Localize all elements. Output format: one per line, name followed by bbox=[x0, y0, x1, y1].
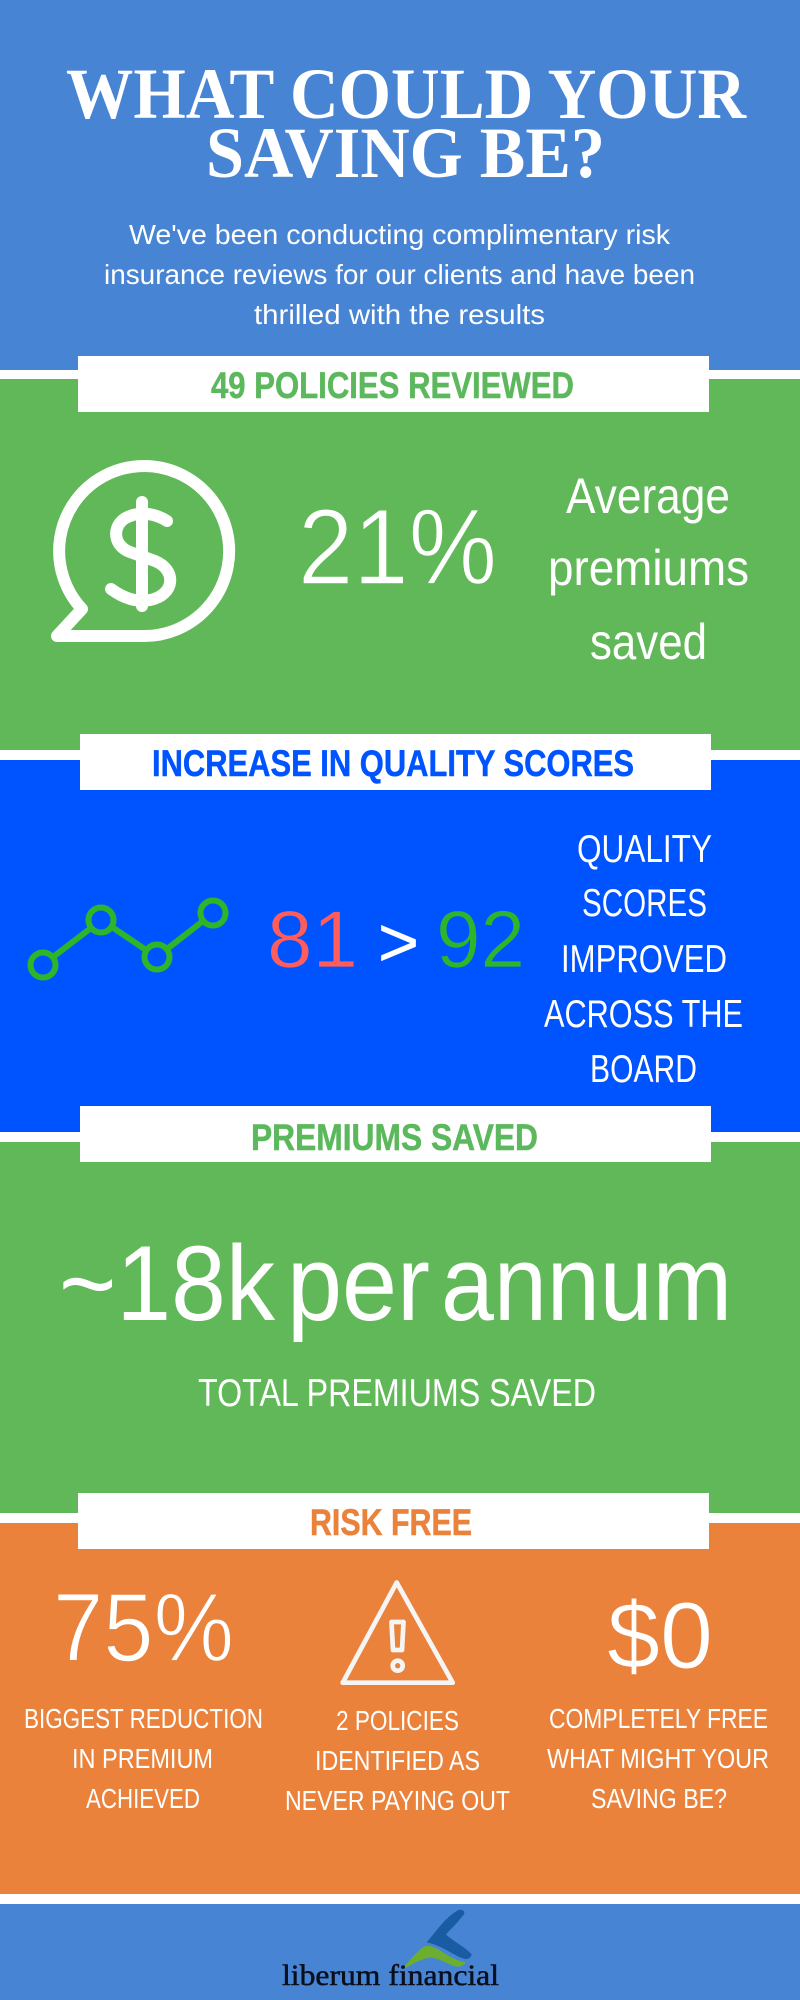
stat: 81 to 92: > bbox=[378, 903, 419, 981]
icon: line chart bbox=[30, 900, 226, 978]
heading banner: risk free bbox=[78, 1493, 709, 1549]
caption: quality scores improved: ACROSS THE bbox=[544, 993, 743, 1036]
caption: average premiums saved bbox=[548, 468, 749, 670]
heading banner: risk free: RISK FREE bbox=[310, 1502, 472, 1543]
caption: quality scores improved: QUALITY bbox=[577, 828, 712, 871]
heading banner: increase in quality scores: INCREASE IN QUALITY SCORES bbox=[152, 743, 634, 784]
stat: 75%: 75% bbox=[53, 1573, 234, 1682]
text: policies never paying: NEVER PAYING OUT bbox=[285, 1785, 510, 1816]
text: biggest reduction bbox=[24, 1703, 263, 1814]
icon: dollar speech bubble bbox=[57, 466, 229, 636]
heading banner: premiums saved bbox=[80, 1106, 711, 1162]
intro text: thrilled with the results bbox=[254, 299, 545, 330]
logo: liberum financial bbox=[282, 1910, 499, 1992]
caption: average premiums saved: premiums bbox=[548, 540, 749, 596]
text: policies never paying: IDENTIFIED AS bbox=[315, 1745, 480, 1776]
panel: policies reviewed bbox=[0, 356, 800, 750]
text: policies never paying bbox=[285, 1705, 510, 1816]
caption: average premiums saved: Average bbox=[566, 468, 730, 524]
title bbox=[66, 54, 747, 193]
stat: 18k per annum bbox=[59, 1223, 732, 1343]
stat: 81 to 92: 81 bbox=[267, 895, 358, 985]
caption: quality scores improved: IMPROVED bbox=[561, 938, 727, 981]
text: policies never paying: 2 POLICIES bbox=[336, 1705, 459, 1736]
caption: quality scores improved: SCORES bbox=[582, 882, 707, 925]
title: WHAT COULD YOUR bbox=[66, 54, 747, 134]
caption: total premiums saved: TOTAL PREMIUMS SAVED bbox=[198, 1372, 596, 1415]
panel: quality scores bbox=[0, 734, 800, 1132]
text: biggest reduction: IN PREMIUM bbox=[72, 1743, 213, 1774]
intro text bbox=[104, 219, 695, 330]
caption: average premiums saved: saved bbox=[590, 614, 707, 670]
panel: header bbox=[0, 0, 800, 370]
text: completely free bbox=[547, 1703, 769, 1814]
panel: footer bbox=[0, 1894, 800, 2000]
caption: quality scores improved: BOARD bbox=[590, 1048, 697, 1091]
stat: $0: $0 bbox=[607, 1583, 713, 1689]
panel: premiums saved bbox=[0, 1106, 800, 1513]
stat: 18k per annum: per bbox=[287, 1223, 430, 1343]
heading banner: premiums saved: PREMIUMS SAVED bbox=[251, 1117, 538, 1158]
intro text: We've been conducting complimentary risk bbox=[129, 219, 671, 250]
panel: risk free bbox=[0, 1493, 800, 1894]
stat: 18k per annum: ~18k bbox=[59, 1223, 275, 1343]
logo: liberum financial: liberum financial bbox=[282, 1959, 499, 1992]
stat: 81 to 92 bbox=[267, 895, 525, 985]
heading banner: 49 policies reviewed bbox=[78, 356, 709, 412]
text: biggest reduction: ACHIEVED bbox=[86, 1783, 200, 1814]
text: biggest reduction: BIGGEST REDUCTION bbox=[24, 1703, 263, 1734]
icon: warning triangle bbox=[343, 1582, 453, 1683]
heading banner: increase in quality scores bbox=[80, 734, 711, 790]
stat: 21%: 21% bbox=[298, 486, 497, 607]
intro text: insurance reviews for our clients and have been bbox=[104, 259, 695, 290]
stat: 18k per annum: annum bbox=[441, 1223, 732, 1343]
caption: quality scores improved bbox=[544, 828, 743, 1091]
text: completely free: SAVING BE? bbox=[591, 1783, 727, 1814]
stat: 81 to 92: 92 bbox=[436, 895, 525, 985]
title: SAVING BE? bbox=[206, 113, 605, 193]
heading banner: 49 policies reviewed: 49 POLICIES REVIEWED bbox=[211, 365, 574, 406]
